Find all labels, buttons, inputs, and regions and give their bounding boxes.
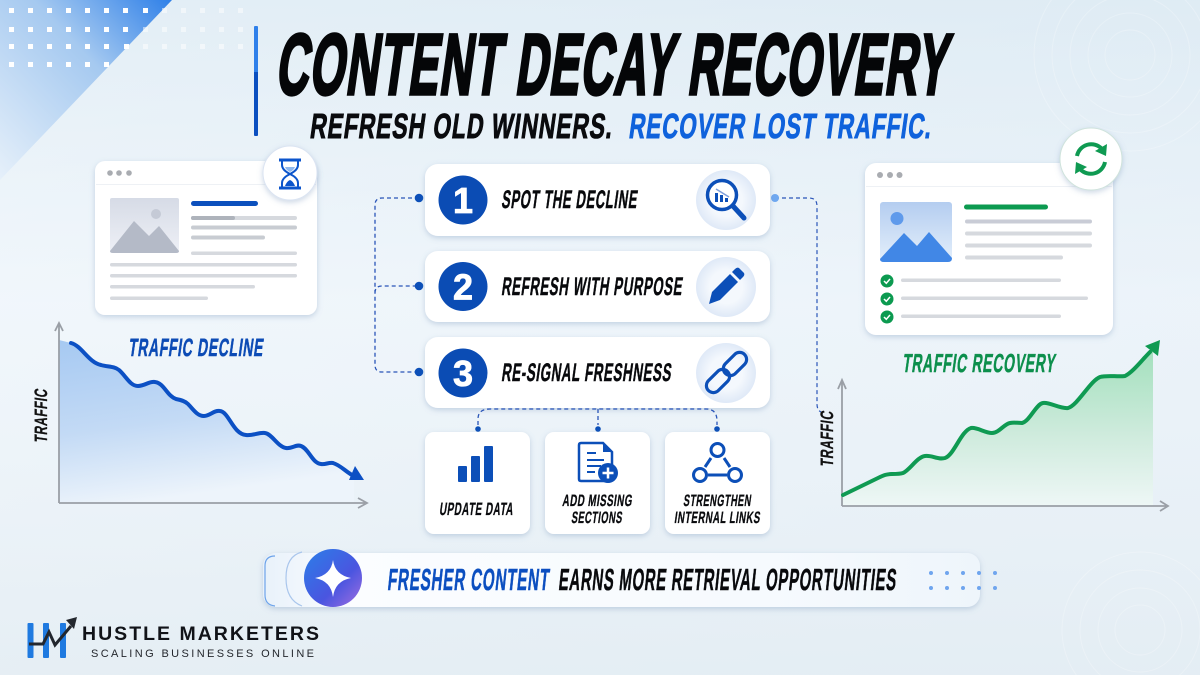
sub card: add missing sections [545, 432, 650, 534]
callout banner [263, 549, 997, 607]
step 3 label: RE-SIGNAL FRESHNESS [500, 359, 674, 387]
dot grid accent [929, 571, 997, 590]
subtitle: RECOVER LOST TRAFFIC. [627, 107, 935, 146]
chart: traffic decline [55, 323, 367, 508]
icon: network triangle [694, 444, 742, 482]
connector: step one to recovery chart [771, 194, 821, 412]
chart label: traffic decline: TRAFFIC DECLINE [127, 334, 266, 362]
panel: old content card [95, 161, 317, 315]
sub card: strengthen internal links [665, 432, 770, 534]
strengthen internal links label: STRENGTHEN [682, 491, 753, 510]
number badge 1: 1 [453, 180, 473, 221]
number badge 2: 2 [453, 266, 473, 308]
step 1 label: SPOT THE DECLINE [500, 186, 640, 214]
add missing sections label: ADD MISSING [561, 491, 634, 510]
step 2 card [425, 251, 770, 322]
panel: refreshed content card [865, 163, 1113, 335]
icon: refresh badge [1060, 128, 1122, 190]
callout text: FRESHER CONTENT [386, 563, 552, 597]
icon: hourglass badge [263, 146, 317, 200]
number badge 3 [438, 348, 488, 398]
step 3 card [425, 337, 770, 408]
connector: step three to sub cards [475, 409, 720, 432]
chart label: traffic recovery: TRAFFIC RECOVERY [901, 348, 1058, 378]
number badge 3: 3 [453, 353, 473, 394]
connector: left steps bracket [375, 194, 423, 376]
subtitle: REFRESH OLD WINNERS. [308, 107, 616, 146]
number badge 2 [438, 262, 488, 311]
strengthen internal links label [673, 491, 762, 527]
logo tagline: SCALING BUSINESSES ONLINE [91, 648, 314, 660]
sub card: update data [425, 432, 530, 534]
logo mark [28, 617, 77, 658]
callout text [386, 563, 899, 597]
icon: bar chart [458, 446, 493, 482]
decorative rings: bottom right [1062, 552, 1200, 675]
logo: Hustle Marketers [28, 617, 319, 660]
update data label: UPDATE DATA [438, 499, 515, 519]
green checklist [880, 274, 1088, 324]
step 2 label: REFRESH WITH PURPOSE [500, 273, 685, 301]
blue corner triangle with dot grid [0, 0, 243, 180]
axis label: right traffic: TRAFFIC [817, 409, 837, 468]
icon: chain link [696, 343, 756, 403]
title accent bar [254, 26, 258, 136]
number badge 1 [438, 176, 488, 224]
icon: document with plus [579, 443, 618, 483]
add missing sections label: SECTIONS [570, 508, 624, 527]
decorative rings: top right [1034, 0, 1200, 151]
step 1 card [425, 164, 770, 236]
faded image placeholder [110, 198, 179, 253]
chart: traffic recovery [838, 340, 1168, 511]
icon: magnifier with chart [696, 170, 756, 230]
vivid image placeholder [880, 202, 952, 262]
add missing sections label [561, 491, 634, 527]
axis label: left traffic: TRAFFIC [31, 387, 51, 444]
logo wordmark: HUSTLE MARKETERS [82, 623, 319, 645]
icon: sparkle orb [304, 549, 362, 607]
strengthen internal links label: INTERNAL LINKS [673, 508, 762, 527]
icon: pencil [696, 257, 756, 317]
